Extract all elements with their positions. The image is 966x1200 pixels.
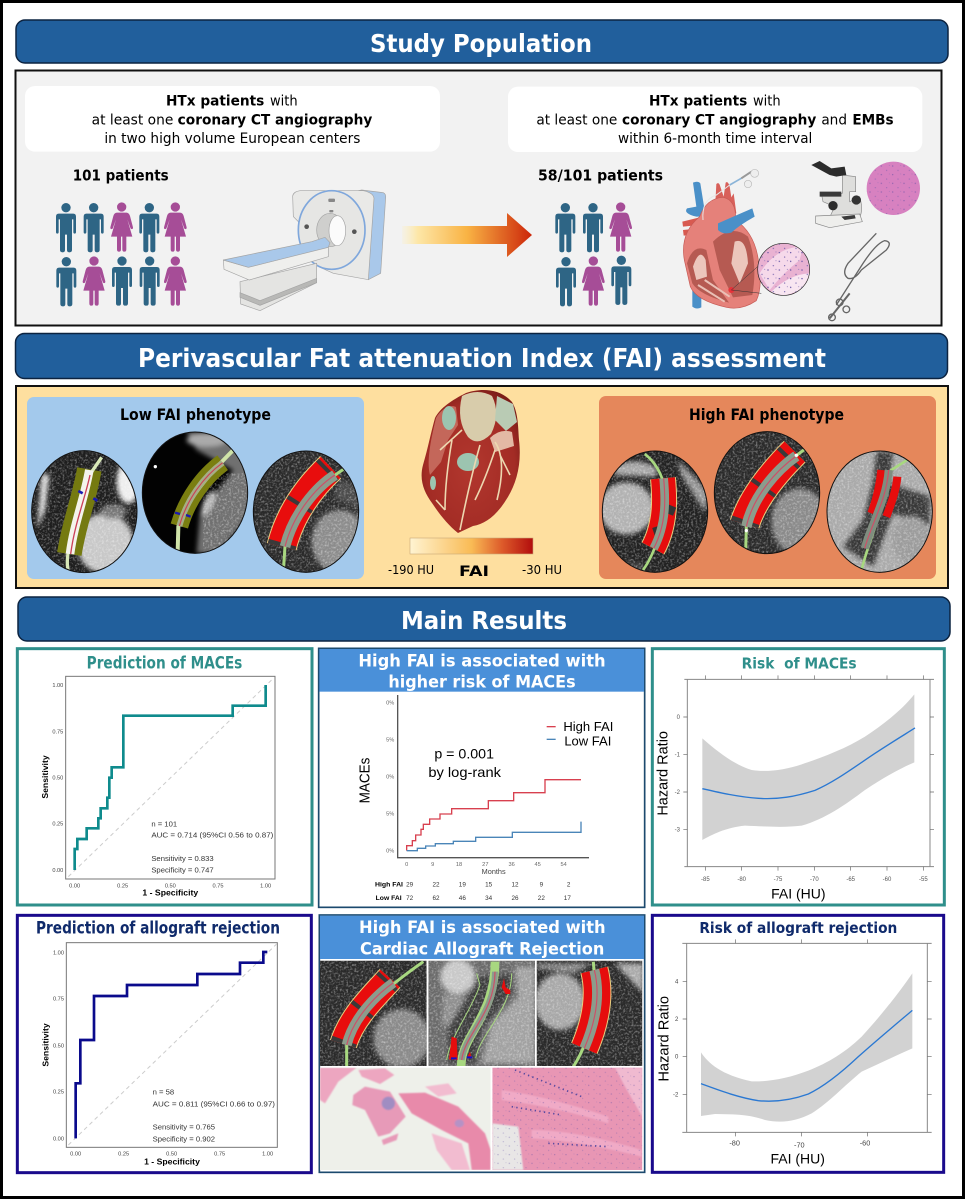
panel: High FAI and allograft rejection: [319, 915, 645, 1172]
banner: Main Results: [18, 597, 950, 641]
ROC chart: 0.00: [70, 1151, 81, 1157]
hazard ratio chart: -2: [673, 1092, 679, 1098]
colour scale: [388, 538, 562, 580]
ROC chart: AUC = 0.714 (95%CI 0.56 to 0.87): [151, 831, 274, 840]
ROC chart: Specificity = 0.902: [153, 1134, 215, 1143]
heading: Low FAI: Low FAI phenotype: [120, 405, 271, 424]
Kaplan-Meier chart: 5%: [386, 737, 394, 743]
heading: Cardiac Allograft Rejection: [360, 939, 604, 958]
Kaplan-Meier chart: 17: [564, 895, 571, 902]
cohort 2 description: EMBs: [852, 112, 894, 128]
ROC chart: 0.50: [53, 1043, 64, 1049]
ROC chart: n = 101: [151, 819, 177, 828]
3D heart rendering: [422, 390, 520, 533]
hazard ratio chart: -55: [919, 877, 928, 883]
Kaplan-Meier chart: 18: [456, 862, 462, 868]
heading: [319, 649, 644, 692]
cohort 1 description: coronary CT angiography: [178, 112, 372, 128]
banner: Study Population: Study Population: [370, 29, 592, 58]
banner: Main Results: Main Results: [401, 606, 567, 635]
Kaplan-Meier chart: 26: [511, 895, 519, 902]
Kaplan-Meier chart: 27: [482, 862, 488, 868]
ROC chart: 0.75: [214, 1151, 225, 1157]
ROC chart: 0.25: [53, 1090, 64, 1096]
panel: High FAI and MACEs survival: [319, 648, 645, 907]
hazard ratio chart: -80: [729, 1138, 740, 1147]
Kaplan-Meier chart: 5%: [386, 811, 394, 817]
hazard ratio chart: 2: [675, 1017, 679, 1023]
icon: heart with biopsy: [682, 169, 813, 309]
panel: High FAI phenotype: [599, 396, 936, 579]
ROC chart: 0.50: [165, 883, 176, 889]
Kaplan-Meier chart: 22: [538, 895, 545, 902]
heading: Risk of allograft rejection: [699, 919, 897, 937]
cohort 1 description: with: [270, 94, 298, 110]
cohort 2 description: at least one: [536, 112, 617, 128]
Kaplan-Meier chart: High FAI: [375, 882, 403, 889]
CT images: low FAI: [30, 430, 368, 573]
ROC chart: 0.75: [212, 883, 224, 889]
Kaplan-Meier chart: 19: [459, 882, 466, 889]
hazard ratio chart: Hazard Ratio: [656, 731, 672, 816]
Kaplan-Meier chart: 0: [405, 862, 408, 868]
Kaplan-Meier chart: 22: [432, 882, 440, 889]
panel: FAI assessment: [16, 386, 948, 588]
Kaplan-Meier chart: [357, 695, 613, 902]
heading: higher risk of MACEs: [388, 673, 576, 692]
hazard ratio chart: -85: [701, 877, 710, 883]
panel: Low FAI phenotype: [27, 397, 368, 579]
icons: 10 patients: [56, 202, 187, 306]
CT images: high FAI: [599, 430, 933, 577]
ROC chart: 0.75: [52, 729, 63, 735]
panel: Risk of allograft rejection: [652, 915, 944, 1172]
hazard ratio chart: -2: [675, 790, 681, 796]
histology image: high magnification: [492, 1068, 642, 1170]
Kaplan-Meier chart: 29: [406, 882, 414, 889]
ROC chart: 0.00: [53, 1136, 64, 1142]
icon: biopsy forceps: [829, 233, 889, 321]
ROC chart: Specificity = 0.747: [151, 866, 214, 875]
Kaplan-Meier chart: 34: [485, 895, 493, 902]
Kaplan-Meier chart: Months: [482, 869, 506, 876]
hazard ratio chart: 0: [677, 715, 681, 721]
Kaplan-Meier chart: 46: [459, 895, 466, 902]
ROC chart: Sensitivity = 0.833: [151, 854, 214, 863]
Kaplan-Meier chart: 9: [431, 862, 434, 868]
panel: Risk of MACEs: [652, 649, 944, 905]
hazard ratio chart: -70: [810, 877, 819, 883]
Kaplan-Meier chart: 54: [561, 862, 567, 868]
Kaplan-Meier chart: 62: [432, 895, 440, 902]
icon: CT scanner: [223, 190, 386, 311]
CT image 1: [320, 961, 430, 1068]
heading: High FAI is associated with: [359, 918, 606, 937]
panel: Prediction of allograft rejection: [17, 915, 311, 1173]
banner: Study Population: [16, 20, 948, 63]
hazard ratio chart: -75: [774, 877, 783, 883]
cohort 2 description: and: [821, 112, 847, 128]
ROC chart: 0.25: [118, 1151, 129, 1157]
ROC chart: 1 - Specificity: [142, 888, 198, 898]
Kaplan-Meier chart: 9: [540, 882, 544, 889]
label: high end: -30 HU: [522, 563, 562, 577]
cohort 1 description: HTx patients: [166, 94, 264, 110]
ROC chart: 1.00: [260, 883, 271, 889]
ROC chart: 1.00: [52, 683, 63, 689]
ROC chart: 0.00: [69, 883, 80, 889]
hazard ratio chart: -60: [860, 1138, 870, 1147]
hazard ratio chart: [656, 675, 934, 902]
hazard ratio chart: -70: [794, 1140, 805, 1149]
ROC chart: [41, 943, 277, 1166]
Kaplan-Meier chart: High FAI: [563, 720, 613, 734]
heading: [320, 916, 644, 959]
ROC chart: 0.50: [166, 1151, 177, 1157]
hazard ratio chart: [656, 939, 932, 1167]
label: FAI: FAI: [459, 564, 489, 580]
ROC chart: 0.75: [53, 996, 64, 1002]
panel: study population: [16, 70, 942, 326]
heading: Prediction of MACEs: [87, 654, 242, 673]
icons: 6 patients: [555, 202, 632, 306]
cohort 2 description: within 6-month time interval: [618, 131, 812, 147]
cohort 1 count: 101 patients: [73, 166, 169, 184]
ROC chart: Sensitivity: [40, 755, 50, 799]
ROC chart: Sensitivity: [41, 1023, 51, 1067]
label: low end: -190 HU: [388, 563, 434, 577]
hazard ratio chart: -3: [675, 827, 681, 833]
ROC chart: 0.25: [117, 883, 128, 889]
ROC chart: 0.50: [52, 776, 63, 782]
hazard ratio chart: -1: [675, 752, 681, 758]
ROC chart: 1.00: [53, 950, 64, 956]
Kaplan-Meier chart: 0%: [386, 774, 394, 780]
hazard ratio chart: FAI (HU): [770, 1151, 825, 1167]
cohort 1 description: at least one: [92, 112, 173, 128]
hazard ratio chart: 4: [675, 979, 679, 985]
cohort 2 description: HTx patients: [649, 94, 747, 110]
heading: Prediction of allograft rejection: [36, 918, 280, 937]
Kaplan-Meier chart: 0%: [386, 849, 394, 855]
heading: High FAI is associated with: [358, 651, 606, 670]
banner: Perivascular FAI assessment: [16, 334, 948, 378]
CT image 2: [428, 959, 535, 1067]
icon: microscope and histology slide: [811, 161, 920, 228]
Kaplan-Meier chart: by log-rank: [428, 764, 502, 780]
Kaplan-Meier chart: 36: [509, 862, 515, 868]
Kaplan-Meier chart: p = 0.001: [434, 745, 494, 761]
hazard ratio chart: -80: [737, 877, 747, 883]
Kaplan-Meier chart: MACEs: [357, 758, 373, 803]
ROC chart: AUC = 0.811 (95%CI 0.66 to 0.97): [153, 1099, 275, 1108]
ROC chart: 1 - Specificity: [144, 1156, 200, 1166]
ROC chart: Sensitivity = 0.765: [153, 1123, 215, 1132]
histology image: low magnification: [320, 1068, 491, 1170]
ROC chart: [40, 676, 275, 898]
Kaplan-Meier chart: 2: [567, 882, 571, 889]
panel: Prediction of MACEs: [17, 649, 312, 905]
hazard ratio chart: Hazard Ratio: [656, 996, 672, 1082]
ROC chart: n = 58: [153, 1087, 174, 1096]
Kaplan-Meier chart: 15: [485, 882, 493, 889]
cohort 1 description: in two high volume European centers: [104, 131, 360, 147]
heading: High FAI: High FAI phenotype: [689, 405, 844, 424]
cohort 2 description: [508, 87, 922, 152]
arrow: [402, 213, 532, 257]
Kaplan-Meier chart: 45: [535, 862, 541, 868]
hazard ratio chart: -65: [846, 877, 856, 883]
hazard ratio chart: -60: [883, 877, 892, 883]
cohort 2 count: 58/101 patients: [538, 166, 663, 184]
ROC chart: 0.25: [52, 822, 63, 828]
hazard ratio chart: 0: [675, 1055, 679, 1061]
banner: Perivascular FAI assessment: Perivascular Fat attenuation Index (FAI) assessment: [138, 344, 826, 374]
Kaplan-Meier chart: 0%: [386, 700, 394, 706]
cohort 1 description: [25, 86, 440, 152]
CT image 3: [535, 961, 643, 1067]
Kaplan-Meier chart: Low FAI: [376, 895, 402, 902]
Kaplan-Meier chart: 12: [511, 882, 519, 889]
heading: Risk of MACEs: [742, 655, 857, 673]
hazard ratio chart: FAI (HU): [771, 886, 826, 902]
ROC chart: 1.00: [262, 1151, 273, 1157]
Kaplan-Meier chart: Low FAI: [564, 735, 611, 749]
ROC chart: 0.00: [52, 868, 63, 874]
Kaplan-Meier chart: 72: [406, 895, 414, 902]
cohort 2 description: coronary CT angiography: [622, 112, 816, 128]
cohort 2 description: with: [753, 94, 781, 110]
